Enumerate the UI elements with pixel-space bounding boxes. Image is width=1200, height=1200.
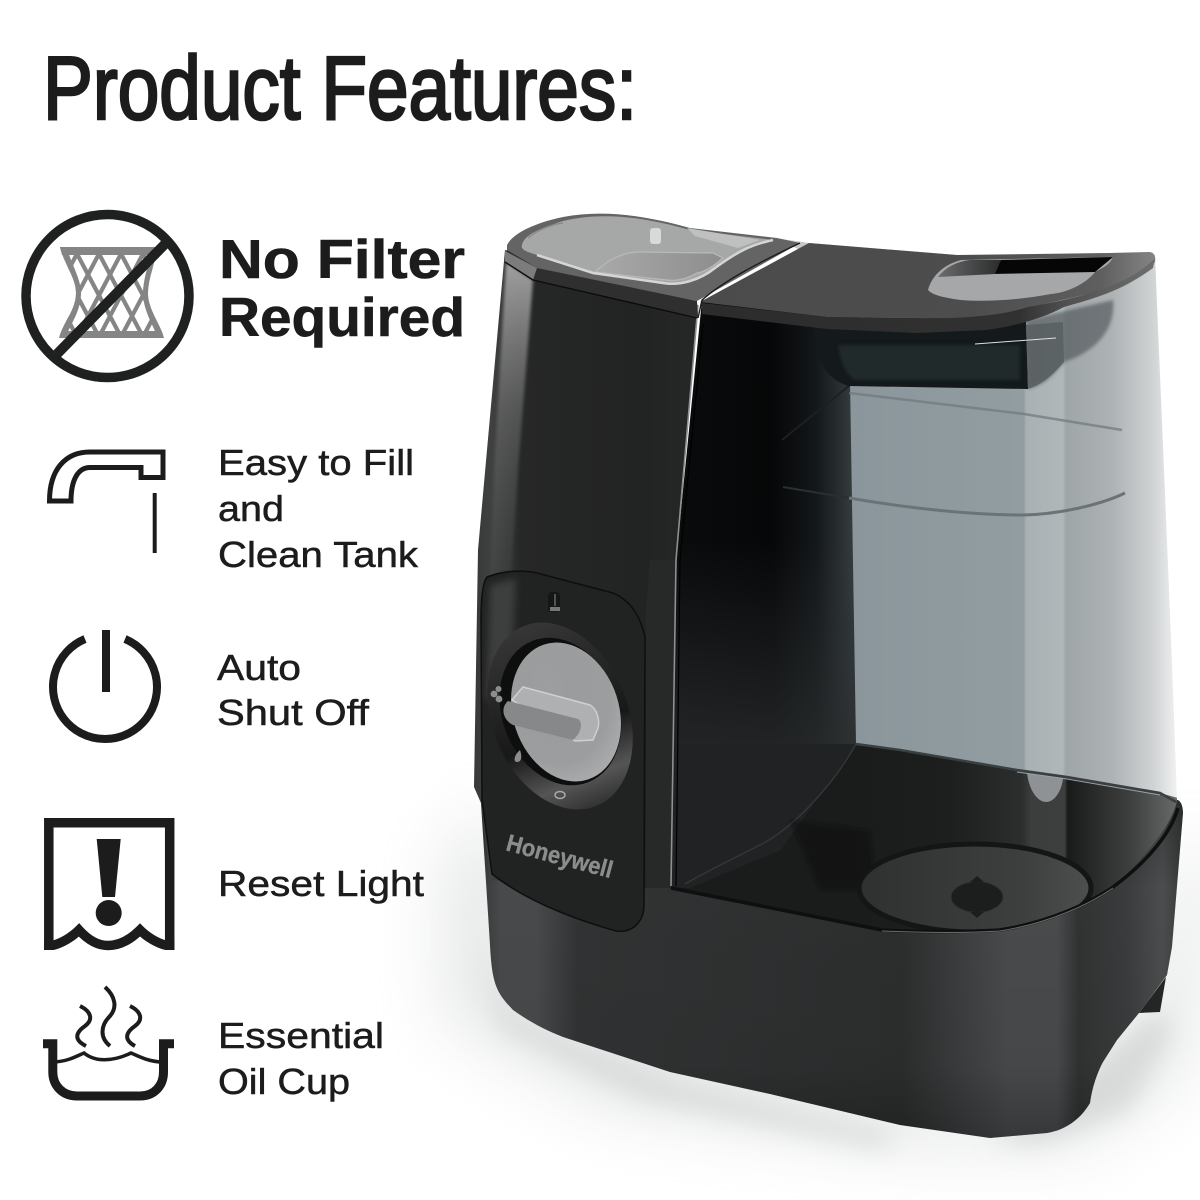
tank floor block [790,820,801,830]
text: auto shut off [217,647,370,733]
text: auto shut off: Auto [217,647,301,688]
text: easy to fill and clean tank: Easy to Fill [218,442,414,483]
foot notch [1139,977,1166,1013]
icon: essential oil cup [43,987,174,1096]
right lid band [702,258,1155,333]
drain plate [859,844,1091,932]
dial [461,601,659,831]
lid rear glass [775,238,957,258]
product: humidifier [461,214,1185,1138]
icon: panel indicator [548,592,560,612]
text: essential oil cup: Oil Cup [218,1061,350,1102]
text: easy to fill and clean tank [218,442,419,575]
heading: no filter required: Required [219,286,465,348]
text: reset light: Reset Light [218,863,424,904]
left lid band [505,250,698,318]
handle pocket [814,300,1113,389]
tank dark interior [660,250,1185,940]
left lid top [507,214,800,301]
knob [494,628,638,796]
right lid top [700,243,1155,319]
lid seam [698,243,800,318]
tank floor [681,745,1177,930]
icon: power [53,630,157,739]
floor shadow [440,800,1200,1150]
tank inner lines [782,385,1125,515]
icon: no filter [26,214,189,378]
icon: faucet [50,452,163,553]
text: essential oil cup [218,1015,384,1102]
text: auto shut off: Shut Off [217,692,370,733]
lid [505,214,1155,333]
heading: no filter required [219,228,465,348]
handle opening [928,257,1113,301]
icon: droplets [491,686,521,762]
icon: reset warning [44,823,174,950]
heading: no filter required: No Filter [219,228,465,290]
title: Product Features: [43,39,637,139]
text: easy to fill and clean tank: and [218,488,284,529]
tank left lower wall [671,744,856,888]
tank base rim [671,808,1178,932]
fill cup opening [522,216,773,284]
brand logo: Honeywell [503,830,616,884]
left column [474,250,698,888]
tank gray water window [849,250,1185,800]
column highlight [490,262,533,600]
knob handle [503,687,599,741]
text: essential oil cup: Essential [218,1015,384,1056]
divider pillar [646,305,703,888]
base [476,780,1183,1138]
control panel [461,571,659,931]
text: easy to fill and clean tank: Clean Tank [218,534,419,575]
